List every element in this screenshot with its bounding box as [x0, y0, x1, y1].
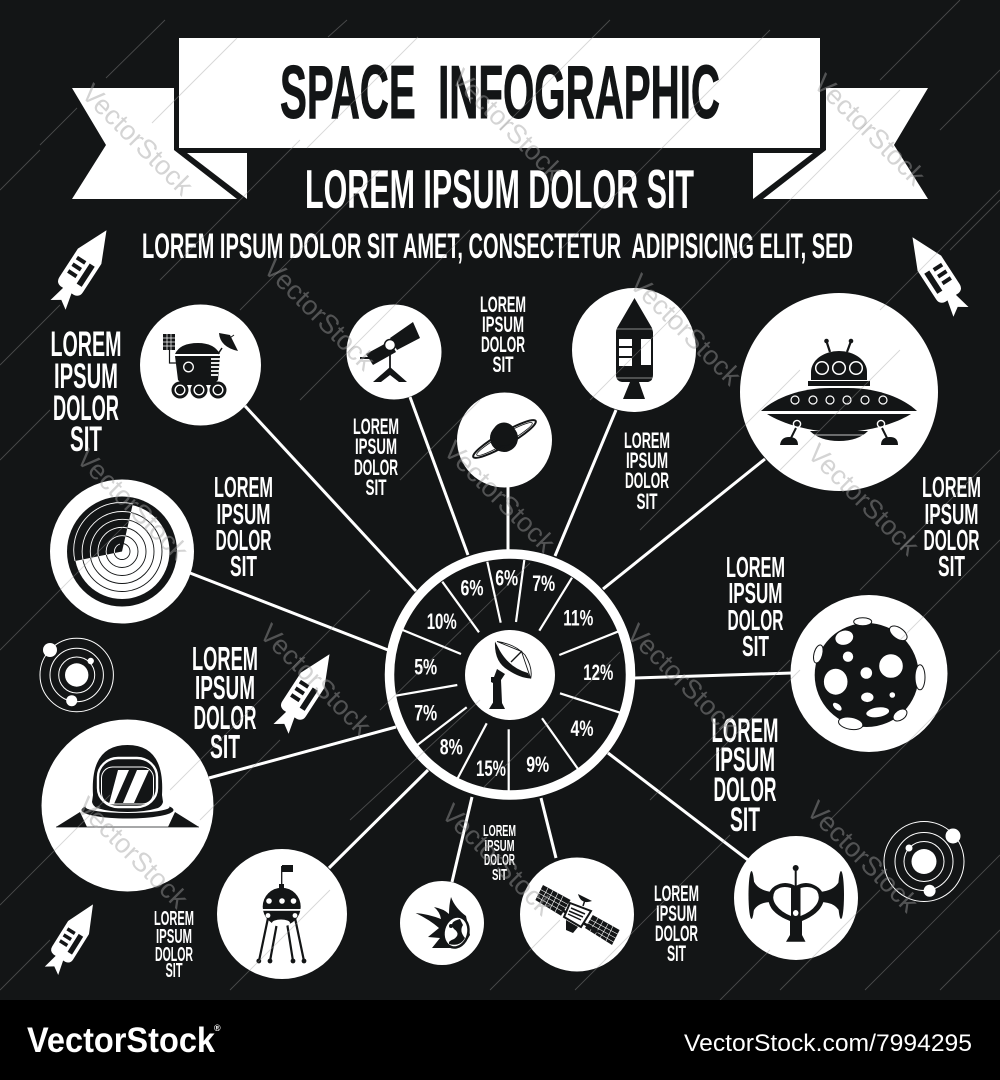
percentage labels: 12% — [583, 660, 613, 685]
footer brand: VectorStock — [27, 1021, 215, 1060]
watermark text: VectorStock — [438, 435, 561, 558]
text block: top left: IPSUM — [54, 357, 118, 396]
footer brand: ® — [214, 1023, 221, 1033]
text block: above saturn: IPSUM — [482, 312, 524, 337]
percentage labels: 15% — [476, 756, 506, 781]
icon: radar — [67, 496, 177, 606]
text block: beside radar: IPSUM — [216, 499, 270, 531]
heading: LOREM IPSUM DOLOR SIT — [305, 158, 694, 220]
text block: beside probe: DOLOR — [155, 944, 193, 966]
text block: beside moon — [726, 552, 785, 663]
text block: under rocket: LOREM — [624, 428, 670, 453]
text block: beside satellite: LOREM — [654, 881, 699, 906]
percentage labels: 8% — [440, 734, 463, 760]
icon: astronaut — [56, 745, 199, 827]
text block: beside radar — [214, 472, 273, 583]
watermark text: VectorStock — [621, 618, 744, 741]
watermark text: VectorStock — [624, 268, 747, 391]
icon: solar system right — [884, 822, 964, 902]
text block: above saturn: LOREM — [480, 292, 526, 317]
text block: under rocket: DOLOR — [625, 468, 669, 493]
panel: astronaut — [42, 720, 214, 892]
icon: solar system left — [40, 638, 113, 712]
icon: rocket centre left — [269, 647, 341, 737]
text block: top left — [50, 325, 122, 459]
text block: beside satellite: SIT — [667, 941, 686, 966]
percentage labels — [414, 566, 613, 781]
percentage labels: 7% — [532, 571, 555, 596]
panel: space probe — [217, 849, 347, 979]
text block: under rocket: IPSUM — [626, 448, 668, 473]
icon: moon — [812, 618, 925, 731]
icon: comet — [416, 897, 473, 952]
text block: under telescope: LOREM — [353, 414, 399, 439]
icon: radio telescope dish — [465, 630, 555, 720]
watermark text: VectorStock — [808, 68, 931, 191]
text block: beside satellite — [654, 881, 699, 966]
text block: under telescope: SIT — [366, 475, 387, 500]
icon: satellite — [535, 885, 620, 945]
text block: beside radar: SIT — [230, 551, 257, 583]
text block: under rocket — [624, 428, 670, 514]
text block: above alien ship: LOREM — [712, 712, 778, 750]
percentage labels: 11% — [563, 606, 593, 630]
text block: under rocket: SIT — [636, 489, 658, 514]
text block: beside moon: DOLOR — [728, 605, 784, 637]
icon: saturn — [470, 415, 539, 463]
percentage labels: 5% — [414, 654, 437, 680]
text block: above comet — [483, 823, 516, 884]
watermark text: VectorStock — [258, 253, 381, 376]
panel: telescope — [346, 304, 442, 400]
icon: rocket bottom left — [41, 898, 103, 977]
text block: above astronaut: LOREM — [192, 640, 258, 677]
text block: under telescope: IPSUM — [355, 434, 397, 459]
text block: beside probe: LOREM — [154, 908, 194, 930]
watermark text: VectorStock — [76, 78, 199, 201]
central percentage wheel — [390, 554, 630, 795]
panel: alien ship — [734, 836, 858, 960]
icon: telescope — [360, 322, 420, 382]
text block: right: SIT — [938, 551, 965, 583]
panel: saturn — [457, 392, 552, 488]
text block: above comet: SIT — [492, 867, 507, 884]
text block: top left: LOREM — [50, 325, 122, 364]
panel: lunar rover — [140, 304, 261, 426]
panel: flying saucer — [740, 293, 938, 491]
text block: beside moon: IPSUM — [728, 578, 782, 610]
text block: beside satellite: IPSUM — [656, 901, 697, 926]
text block: above saturn — [480, 292, 526, 377]
footer band — [0, 1000, 1000, 1080]
percentage labels: 6% — [495, 566, 518, 590]
text block: under telescope: DOLOR — [354, 455, 398, 480]
icon: rocket capsule — [616, 298, 653, 399]
text block: beside radar: LOREM — [214, 472, 273, 504]
watermark text: VectorStock — [802, 438, 925, 561]
text block: above alien ship: DOLOR — [714, 771, 776, 809]
text block: above comet: DOLOR — [484, 852, 515, 869]
text block: beside satellite: DOLOR — [655, 921, 698, 946]
icon: lunar rover — [163, 333, 238, 398]
watermark text: VectorStock — [801, 795, 924, 918]
icon: space probe — [256, 865, 306, 963]
text block: right — [922, 472, 981, 583]
watermark text — [71, 63, 931, 921]
watermark text: VectorStock — [446, 63, 569, 186]
text block: under telescope — [353, 414, 399, 500]
connector lines — [190, 397, 792, 882]
percentage labels: 4% — [570, 716, 594, 741]
text block: above alien ship: SIT — [730, 801, 760, 839]
percentage labels: 6% — [460, 576, 484, 600]
text block: above astronaut: IPSUM — [195, 669, 255, 706]
icon: rocket top left — [46, 223, 118, 313]
text block: top left: SIT — [70, 420, 102, 459]
text block: above alien ship — [712, 712, 778, 839]
footer url: VectorStock.com/7994295 — [684, 1030, 972, 1057]
title banner — [72, 38, 928, 199]
watermark text: VectorStock — [254, 618, 377, 741]
icon: alien ship — [748, 865, 844, 942]
text block: above astronaut: SIT — [210, 728, 240, 765]
percentage labels: 9% — [526, 752, 549, 777]
panel: cratered moon — [790, 595, 948, 752]
text block: beside moon: LOREM — [726, 552, 785, 584]
text block: beside probe: SIT — [166, 960, 182, 982]
panel: radar — [50, 480, 194, 624]
text block: beside moon: SIT — [742, 631, 769, 663]
text block: above comet: LOREM — [483, 823, 516, 840]
watermark text: VectorStock — [436, 798, 559, 921]
percentage labels: 10% — [427, 609, 457, 634]
text block: beside probe — [154, 908, 194, 982]
watermark text: VectorStock — [71, 791, 194, 914]
text block: above comet: IPSUM — [484, 838, 514, 855]
panel: rocket — [572, 288, 696, 412]
text block: above saturn: SIT — [492, 352, 514, 377]
panel: comet — [400, 881, 484, 965]
watermark text: VectorStock — [71, 443, 194, 566]
percentage labels: 7% — [414, 700, 437, 726]
text block: top left: DOLOR — [53, 389, 119, 428]
icon: rocket top right — [901, 230, 973, 320]
text block: beside radar: DOLOR — [216, 525, 272, 557]
text block: beside probe: IPSUM — [156, 926, 192, 948]
icon: flying saucer — [761, 339, 917, 445]
text block: above astronaut — [192, 640, 258, 765]
panel: satellite — [520, 858, 634, 972]
text block: above alien ship: IPSUM — [715, 741, 775, 779]
text block: above astronaut: DOLOR — [194, 699, 257, 736]
text block: above saturn: DOLOR — [481, 332, 525, 357]
